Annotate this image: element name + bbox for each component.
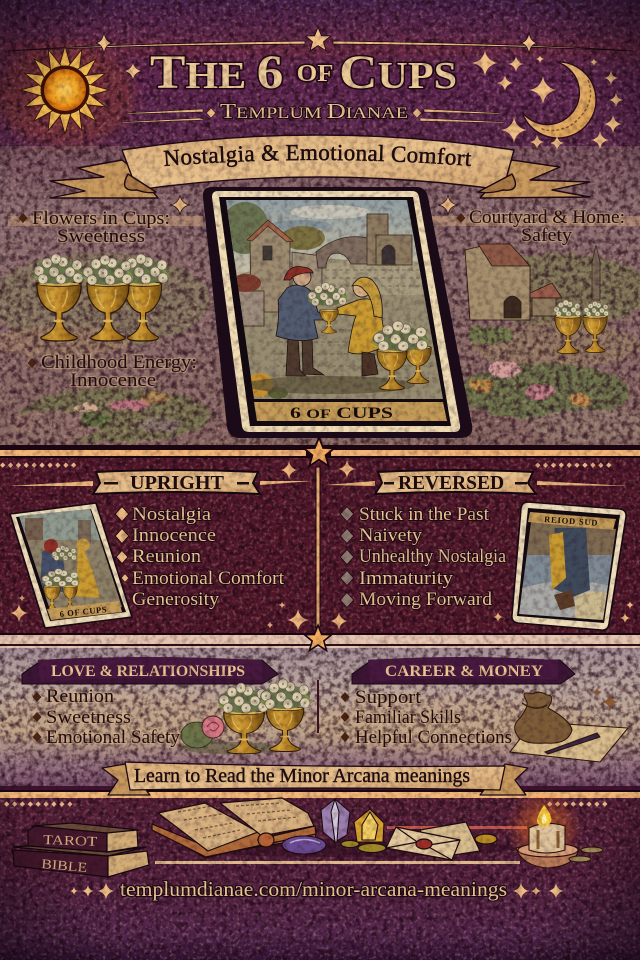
right goblets with flowers — [553, 300, 609, 354]
ribbon text: Nostalgia & Emotional Comfort — [163, 144, 472, 168]
title: C — [339, 46, 378, 99]
landscape right — [460, 254, 640, 441]
tarot book stack — [13, 823, 149, 877]
career ribbon: CAREER & MONEY — [385, 663, 543, 680]
love ribbon — [22, 657, 278, 684]
love ribbon: LOVE & RELATIONSHIPS — [51, 663, 245, 680]
tarot book: TAROT — [43, 832, 98, 849]
small reversed card: REIOD SUD — [544, 514, 599, 528]
cta ribbon — [102, 762, 528, 795]
upright bullets — [115, 506, 129, 582]
url: templumdianae.com/minor-arcana-meanings — [120, 877, 507, 901]
card label: 6 OF CUPS — [290, 405, 393, 422]
envelope — [386, 822, 497, 860]
reversed banner — [325, 470, 630, 494]
career list: Helpful Connections — [355, 728, 512, 748]
love bullets — [32, 692, 42, 742]
title: UPS — [378, 55, 457, 97]
reversed list: Immaturity — [359, 568, 454, 589]
divider upper — [0, 437, 640, 466]
section sparkles beside card — [170, 195, 458, 215]
reversed list: Unhealthy Nostalgia — [359, 546, 507, 567]
upright list: Nostalgia — [132, 504, 212, 525]
icon: money bag, paper, pen — [510, 692, 628, 762]
ribbon body — [122, 135, 514, 190]
right label: courtyard and home — [432, 207, 640, 246]
left goblets with flowers — [33, 254, 169, 341]
section sparkles — [10, 460, 634, 631]
left label: childhood energy: Childhood Energy: — [41, 352, 197, 373]
small upright card: 6 OF CUPS — [59, 604, 108, 619]
title: THE 6 — [150, 46, 281, 99]
left label: flowers in cups: Sweetness — [57, 226, 145, 247]
right label: courtyard and home: Courtyard & Home: — [469, 207, 625, 228]
upright list — [132, 504, 285, 610]
upright list: Generosity — [132, 589, 220, 610]
upright banner: UPRIGHT — [130, 472, 225, 494]
crystals and stone — [282, 799, 386, 854]
upright banner — [8, 470, 312, 494]
ribbon left tail — [50, 160, 158, 198]
career bullets — [340, 692, 350, 742]
centre goblet and bouquet — [308, 282, 347, 333]
card frame — [203, 187, 472, 438]
centre vertical divider — [316, 467, 320, 629]
left label: flowers in cups: Flowers in Cups: — [32, 208, 170, 229]
subtitle: TEMPLUM DIANAE — [220, 99, 408, 123]
right label: courtyard and home: Safety — [521, 225, 573, 246]
upright list: Innocence — [132, 525, 216, 546]
left label: childhood energy — [28, 352, 197, 391]
right cottage — [465, 244, 600, 320]
reversed list: Stuck in the Past — [359, 504, 490, 525]
title sparkle — [124, 62, 142, 80]
card artwork — [220, 195, 450, 400]
title: OF — [297, 61, 339, 87]
dotted lines upper — [0, 461, 614, 469]
footer band and rule — [0, 786, 640, 798]
girl figure — [337, 277, 386, 376]
reversed list: Naivety — [359, 525, 423, 546]
dotted lines lower: ◆◆◆◆◆◆◆◆◆ — [4, 800, 75, 808]
card label — [254, 402, 447, 422]
love list: Emotional Safety — [46, 728, 181, 748]
divider lower — [0, 625, 640, 650]
career list — [355, 688, 512, 748]
landscape left — [0, 252, 210, 442]
icon: crescent moon — [522, 62, 596, 138]
upright list: Reunion — [132, 546, 202, 567]
cta text: Learn to Read the Minor Arcana meanings — [134, 765, 470, 787]
ribbon folds — [125, 174, 515, 193]
reversed list — [359, 504, 507, 610]
dotted lines lower — [4, 800, 610, 808]
love list — [46, 687, 181, 748]
url sparkles — [70, 882, 564, 900]
dotted lines lower: ◆◆◆◆◆◆◆◆ — [547, 800, 610, 808]
subtitle rules — [122, 108, 504, 123]
moon stars — [472, 50, 623, 150]
vertical divider lower — [317, 680, 319, 733]
top rule with stars — [8, 27, 633, 54]
dotted lines upper: ◆◆◆◆◆◆◆◆◆◆ — [535, 461, 614, 469]
goblets and rose — [180, 679, 311, 754]
career sparkles — [592, 688, 618, 710]
icon: sun — [21, 46, 109, 134]
career ribbon — [352, 657, 575, 684]
career list: Support — [355, 688, 422, 708]
boy figure — [276, 267, 326, 376]
main tarot card — [203, 187, 472, 438]
ribbon right tail — [480, 160, 590, 198]
dotted lines upper: ◆◆◆◆◆◆◆◆◆◆ — [0, 461, 79, 469]
candle — [506, 790, 603, 868]
main ribbon banner — [50, 135, 590, 198]
upright list: Emotional Comfort — [132, 568, 285, 589]
card goblets right — [372, 321, 431, 390]
open book — [152, 798, 316, 858]
left label: flowers in cups — [8, 208, 203, 247]
love list: Sweetness — [46, 708, 131, 728]
reversed list: Moving Forward — [359, 589, 492, 610]
table line — [155, 826, 527, 864]
small upright card — [10, 503, 132, 628]
love list: Reunion — [46, 687, 114, 707]
bible book: BIBLE — [41, 856, 88, 875]
career list: Familiar Skills — [355, 708, 461, 728]
reversed banner: REVERSED — [398, 472, 504, 494]
small reversed card — [512, 502, 626, 630]
left label: childhood energy: Innocence — [70, 370, 156, 391]
reversed bullets — [340, 506, 354, 608]
